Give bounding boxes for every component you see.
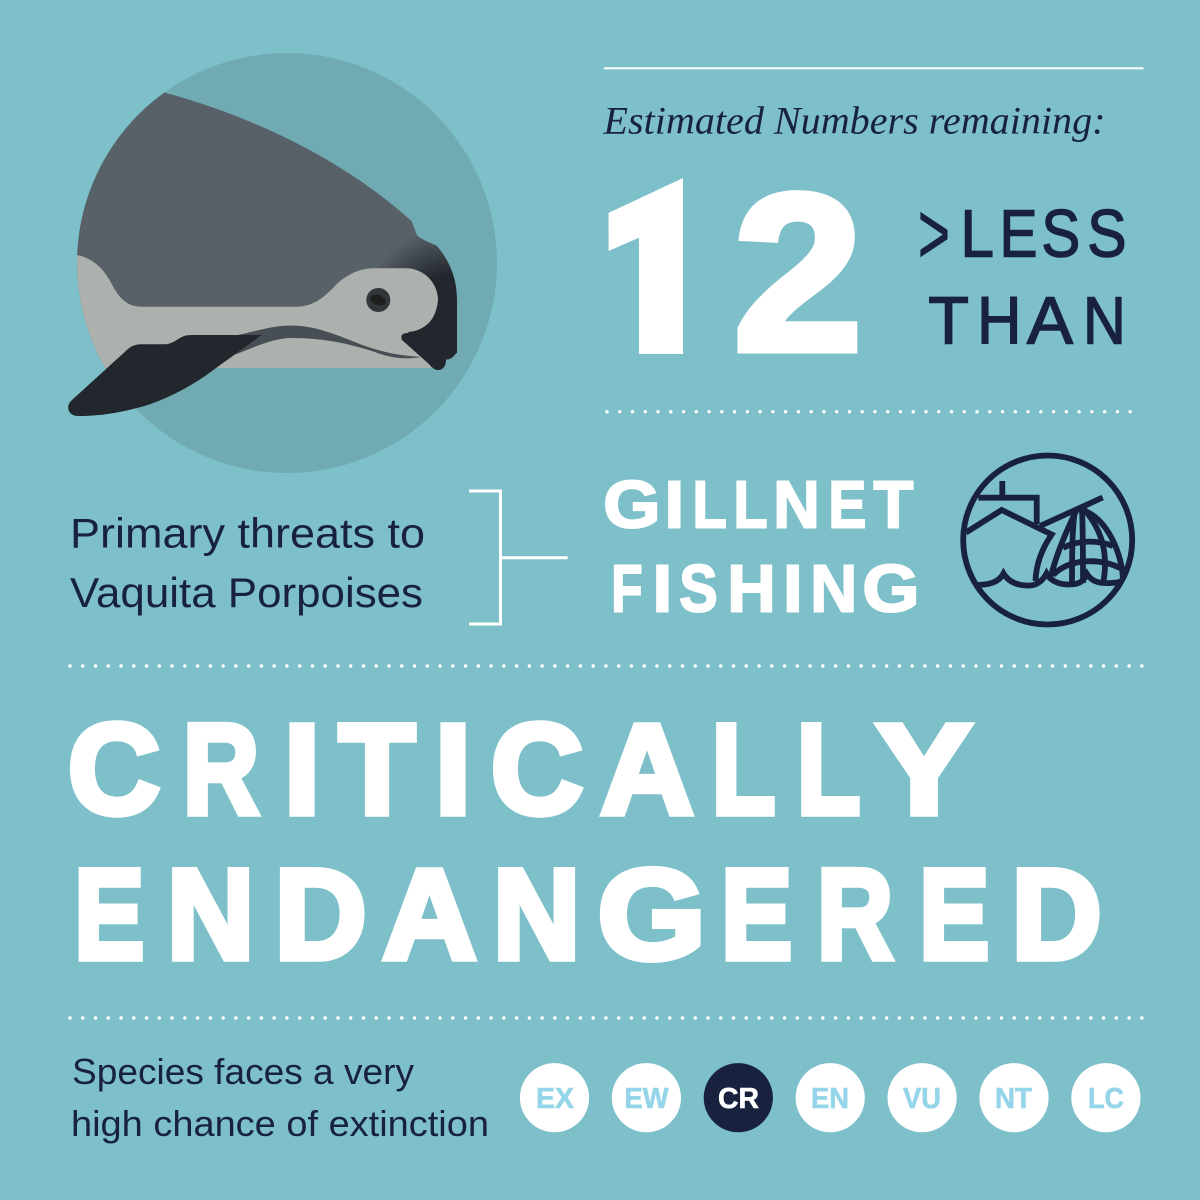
text: primary threats	[70, 510, 425, 616]
heading: endangered: R	[817, 844, 893, 986]
porpoise body	[77, 92, 457, 368]
heading: critically: A	[600, 698, 694, 842]
heading: critically: I	[284, 698, 320, 842]
heading: gillnet fishing: N	[773, 467, 820, 542]
text: primary threats: Primary threats to	[70, 510, 425, 557]
heading: critically: C	[491, 698, 583, 842]
text: species description	[71, 1051, 489, 1144]
label: less than: S	[1087, 196, 1127, 271]
badge: NT: NT	[995, 1083, 1032, 1115]
heading: gillnet fishing: I	[652, 552, 672, 627]
heading: endangered: D	[1012, 844, 1102, 986]
badge: LC: LC	[1088, 1083, 1124, 1115]
badge: EW: EW	[624, 1083, 669, 1115]
status badges	[520, 1063, 1140, 1132]
illustration: vaquita porpoise	[60, 53, 497, 473]
badge: VU: VU	[903, 1083, 941, 1115]
heading: critically: R	[183, 698, 259, 842]
badge: EW	[612, 1063, 681, 1132]
porpoise flipper	[68, 335, 262, 416]
heading: critically: Y	[876, 698, 972, 842]
badge: EX: EX	[536, 1083, 575, 1115]
number: 12: 1	[585, 128, 715, 407]
number: 12	[608, 178, 858, 354]
badge: CR: CR	[718, 1083, 759, 1115]
heading: endangered	[74, 844, 1102, 986]
label: less than: S	[1041, 196, 1080, 271]
badge: VU	[888, 1063, 957, 1132]
text: species description: high chance of extinction	[71, 1103, 489, 1144]
heading: gillnet fishing: E	[828, 467, 866, 542]
label: less than: H	[977, 283, 1021, 358]
heading: gillnet fishing: F	[611, 552, 642, 627]
icon: fishing boat with net	[963, 456, 1132, 624]
badge: CR	[704, 1063, 773, 1132]
bracket	[469, 491, 568, 624]
heading: gillnet fishing: L	[692, 467, 727, 542]
heading: gillnet fishing: T	[874, 467, 913, 542]
heading: gillnet fishing: N	[810, 552, 857, 627]
label: less than: L	[960, 196, 994, 271]
dotted divider	[70, 1016, 1144, 1020]
heading: gillnet fishing	[603, 467, 920, 627]
badge: NT	[979, 1063, 1049, 1132]
porpoise mouth line	[225, 326, 421, 358]
top rule	[604, 67, 1144, 69]
heading: critically: L	[797, 698, 860, 842]
badge: EN: EN	[811, 1083, 849, 1115]
heading: gillnet fishing: L	[734, 467, 768, 542]
label: less than: A	[1027, 283, 1073, 358]
badge: EN	[796, 1063, 865, 1132]
text: primary threats: Vaquita Porpoises	[70, 569, 423, 616]
porpoise belly	[60, 255, 438, 368]
heading: critically: C	[68, 698, 160, 842]
heading: critically	[68, 698, 972, 842]
heading: gillnet fishing: I	[664, 467, 684, 542]
dotted divider	[607, 410, 1131, 413]
label: less than: T	[928, 283, 969, 358]
dotted divider	[70, 664, 1144, 668]
badge: EX	[520, 1063, 589, 1132]
heading: gillnet fishing: H	[727, 552, 776, 627]
label: less than: >	[918, 186, 950, 282]
badge: LC	[1071, 1063, 1140, 1132]
heading: gillnet fishing: S	[679, 552, 718, 627]
porpoise jaw	[401, 300, 457, 370]
heading: endangered: E	[721, 844, 792, 986]
label: less than: N	[1083, 283, 1126, 358]
heading: critically: L	[712, 698, 775, 842]
heading: critically: I	[435, 698, 471, 842]
label: estimated numbers remaining: Estimated Numbers remaining:	[602, 99, 1106, 142]
heading: endangered: E	[919, 844, 989, 986]
label: less than: E	[1000, 196, 1037, 271]
heading: gillnet fishing: G	[603, 467, 661, 542]
heading: endangered: D	[275, 844, 367, 986]
heading: endangered: G	[598, 844, 706, 986]
text: species description: Species faces a very	[72, 1051, 415, 1092]
porpoise eye	[366, 288, 390, 312]
heading: endangered: N	[167, 844, 254, 986]
heading: endangered: A	[382, 844, 476, 986]
number: 12: 2	[733, 148, 863, 398]
heading: gillnet fishing: I	[783, 552, 803, 627]
heading: endangered: N	[493, 844, 580, 986]
heading: endangered: E	[74, 844, 144, 986]
label: less than	[918, 186, 1127, 358]
heading: gillnet fishing: G	[862, 552, 920, 627]
heading: critically: T	[339, 698, 415, 842]
